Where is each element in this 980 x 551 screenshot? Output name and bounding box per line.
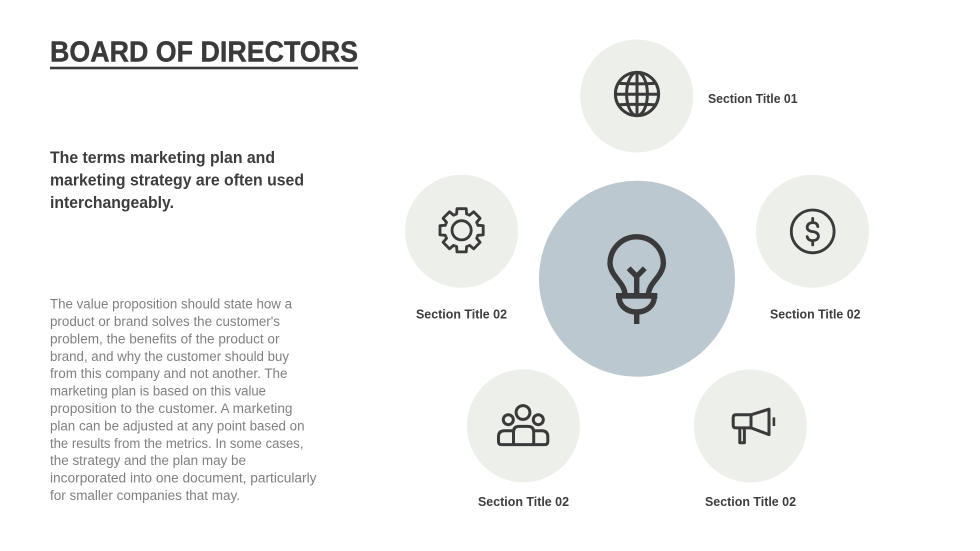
body paragraph: brand, and why the customer should buy (50, 349, 289, 364)
node: right dollar coin: Section Title 02 (770, 307, 860, 321)
body paragraph: from this company and not another. The (50, 366, 288, 381)
body paragraph (50, 297, 317, 503)
title with underline: BOARD OF DIRECTORS (50, 37, 358, 69)
node: section title 01 globe (580, 40, 798, 152)
body paragraph: plan can be adjusted at any point based on (50, 418, 304, 433)
body paragraph: for smaller companies that may. (50, 488, 240, 503)
node: left gear (405, 175, 518, 321)
body paragraph: the results from the metrics. In some cases, (50, 436, 304, 451)
node: bottom-right megaphone: Section Title 02 (705, 495, 796, 509)
node: bottom-left people (467, 369, 580, 509)
body paragraph: incorporated into one document, particularly (50, 471, 317, 486)
subheading: The terms marketing plan and (50, 149, 275, 167)
body paragraph: marketing plan is based on this value (50, 384, 266, 399)
central circle with light bulb (539, 181, 735, 377)
node: bottom-left people: Section Title 02 (478, 495, 569, 509)
body paragraph: proposition to the customer. A marketing (50, 401, 292, 416)
node: bottom-right megaphone (694, 370, 807, 509)
node: right dollar coin (756, 175, 869, 321)
subheading (50, 149, 304, 212)
body paragraph: The value proposition should state how a (50, 297, 293, 312)
node: left gear: Section Title 02 (416, 307, 507, 321)
body paragraph: problem, the benefits of the product or (50, 331, 280, 346)
subheading: marketing strategy are often used (50, 171, 304, 189)
node: section title 01 globe: Section Title 01 (708, 92, 798, 106)
body paragraph: product or brand solves the customer's (50, 314, 280, 329)
body paragraph: the strategy and the plan may be (50, 453, 246, 468)
subheading: interchangeably. (50, 194, 174, 212)
